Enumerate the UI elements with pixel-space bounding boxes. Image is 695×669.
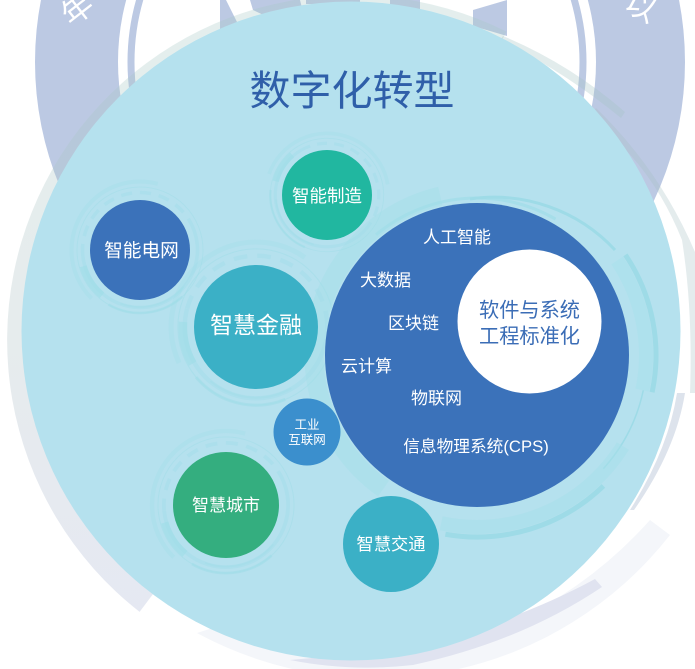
node: 智慧金融: 智慧金融 <box>210 312 302 338</box>
label: 区块链: 区块链 <box>388 314 439 333</box>
node: 智能电网: 智能电网 <box>104 240 179 261</box>
seal outer disc <box>35 0 685 387</box>
node: 智慧城市: 智慧城市 <box>192 496 260 515</box>
node: 工业互联网: 工业 <box>294 418 320 432</box>
node: 智慧城市 <box>121 400 331 610</box>
central blue disc <box>325 203 629 507</box>
node: 智慧交通 <box>343 496 439 592</box>
lavender swoosh band bottom <box>290 579 602 668</box>
central technology circle <box>325 203 629 507</box>
node: 智慧交通: 智慧交通 <box>356 534 426 554</box>
white core circle <box>458 250 602 394</box>
outer swoosh band left and top <box>7 0 507 612</box>
seal inner white disc <box>118 0 596 301</box>
node: 智能制造 <box>211 79 443 311</box>
outer swoosh band upper right <box>500 36 625 118</box>
pale swoosh band bottom <box>197 520 670 669</box>
node: 工业互联网 <box>274 398 340 466</box>
outer swoosh band right <box>588 108 695 393</box>
label: 物联网: 物联网 <box>411 389 462 408</box>
seal emblem shapes <box>220 0 507 36</box>
watermark seal in background <box>35 0 685 387</box>
node: 智能制造: 智能制造 <box>292 186 362 206</box>
ring decoration around central circle <box>220 98 695 612</box>
title: 数字化转型 <box>250 68 454 114</box>
node: 工业互联网: 互联网 <box>288 433 326 447</box>
node: 智慧金融 <box>102 173 410 481</box>
label: 大数据: 大数据 <box>360 271 411 290</box>
node: 智能电网 <box>43 153 237 347</box>
label: 信息物理系统(CPS): 信息物理系统(CPS) <box>403 437 549 456</box>
seal thin inner ring <box>131 0 583 288</box>
outer thin band lower right <box>630 393 685 510</box>
label: 人工智能: 人工智能 <box>423 228 491 247</box>
label: 云计算: 云计算 <box>341 357 392 376</box>
core label second line: 工程标准化 <box>479 325 580 348</box>
core label: 软件与系统 <box>479 299 580 322</box>
